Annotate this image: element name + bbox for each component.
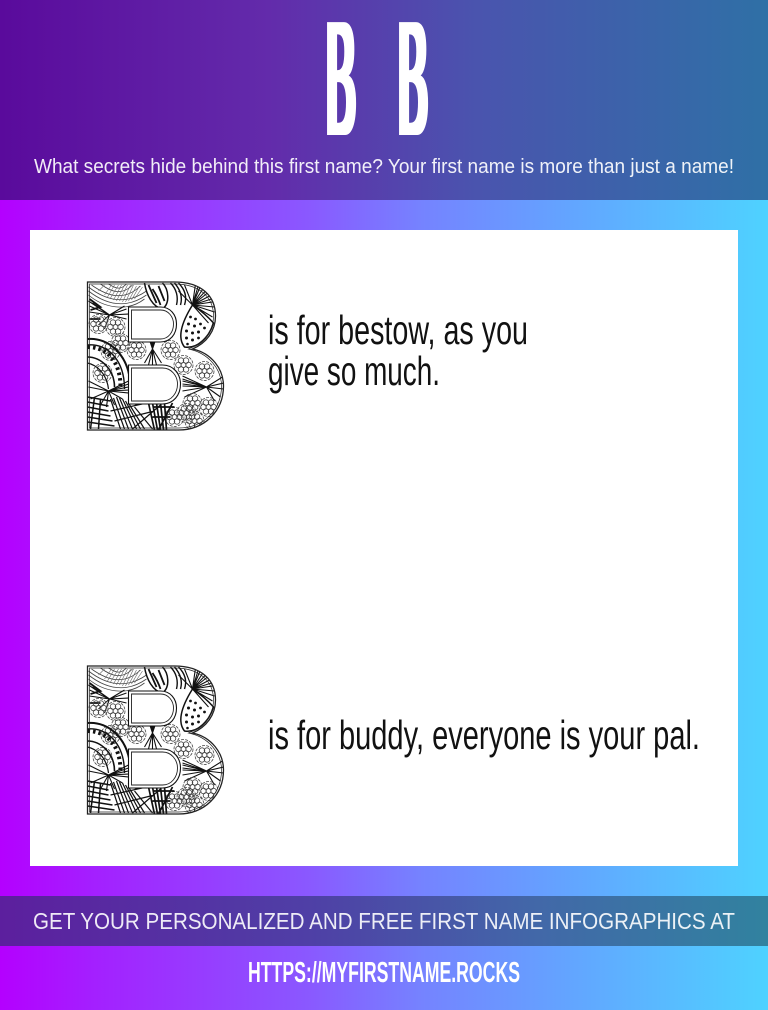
text: first letter meaning: is for bestow, as you [268, 307, 528, 353]
header band [0, 0, 768, 200]
text: first letter meaning [268, 307, 528, 394]
website url: HTTPS://MYFIRSTNAME.ROCKS [248, 957, 520, 989]
text: first letter meaning: give so much. [268, 348, 440, 394]
icon: decorative letter B, second [88, 666, 224, 814]
title letters [326, 0, 427, 171]
subtitle: What secrets hide behind this first name? Your first name is more than just a name! [34, 156, 734, 178]
icon: decorative letter B, first [88, 282, 224, 430]
white content panel [30, 230, 738, 866]
footer band [0, 896, 768, 946]
